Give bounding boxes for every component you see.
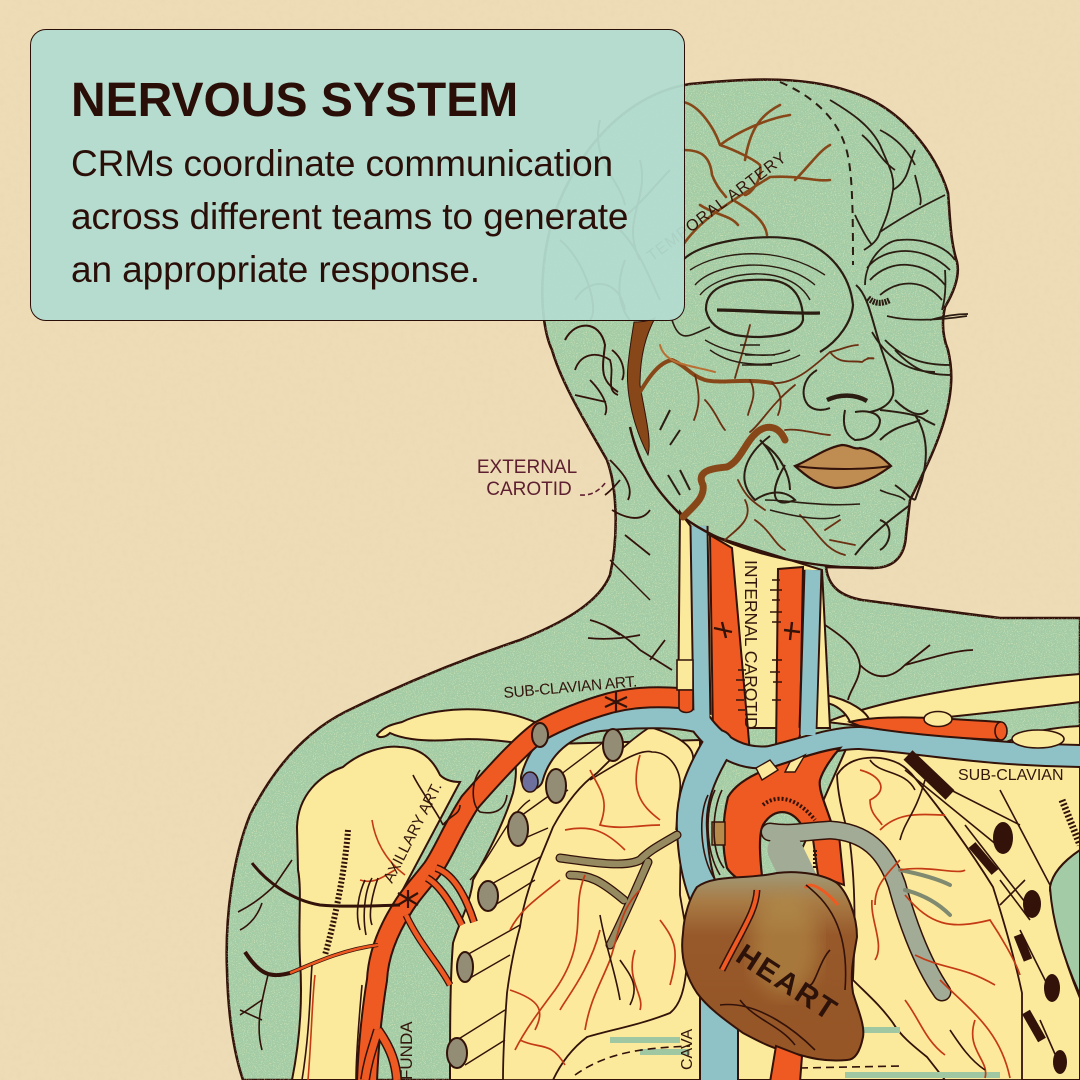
body text: across different teams to generate [71,196,628,237]
vein end cap [522,772,538,792]
neck column with carotid arteries [678,512,830,753]
heading: NERVOUS SYSTEM [71,74,518,127]
anatomical labels: HEART [730,938,842,1027]
ear [565,326,618,392]
lung bronchial branches [510,755,1020,1078]
neck and shoulder branches [575,350,973,700]
aorta [702,748,844,975]
green lobe right side [1050,850,1080,995]
right lung [837,758,1022,1080]
forehead arteries [683,102,830,245]
temporal trunk [627,318,655,455]
jaw line [630,427,873,568]
anatomical labels: SUB-CLAVIAN [958,767,1064,784]
neck hatching [714,580,800,710]
body text: an appropriate response. [71,249,480,290]
heart [682,872,863,1080]
label: external carotid: CAROTID [486,479,572,500]
anatomical labels: FUNDA [397,1021,416,1080]
skin speckle [220,70,1080,1080]
artery stars [398,692,627,908]
right forehead branches [830,100,945,250]
pulmonary artery [560,830,950,992]
anatomical labels: TEMPORAL ARTERY [644,149,790,265]
nose and mouth lines [660,285,935,555]
anatomical labels: AXILLARY ART. [380,780,446,886]
ribs left [457,735,613,1065]
lips [795,445,891,488]
arm and pulmonary dark branches [238,760,985,1080]
label: external carotid [477,457,606,500]
label: external carotid: EXTERNAL [477,457,577,478]
anatomical labels: INTERNAL CAROTID [741,560,761,730]
chest and arm yellow areas [292,674,1080,1080]
body silhouette [227,80,1080,1080]
anatomical labels [380,149,1064,1080]
body text [71,143,628,290]
anatomical labels: SUB-CLAVIAN ART. [503,673,638,702]
major veins [532,526,1080,1080]
anatomical illustration [225,78,1080,1080]
left lung [503,727,693,1080]
left eye and brow [672,237,853,365]
face and head details [627,82,968,568]
panel: nervous system callout [30,29,685,321]
right eye and brow [865,240,968,375]
yellow rib tubes and right shoulder artery [677,660,1064,748]
facial branches [640,325,874,555]
green lower abdomen bands [575,1030,1000,1075]
anatomical labels: CAVA [679,1028,696,1070]
ghosted head detail under panel [560,120,670,320]
subclavian and axillary arteries [245,697,680,1080]
body text: CRMs coordinate communication [71,143,613,184]
ribs right [905,755,1080,1074]
temporal dashed line [780,82,853,265]
